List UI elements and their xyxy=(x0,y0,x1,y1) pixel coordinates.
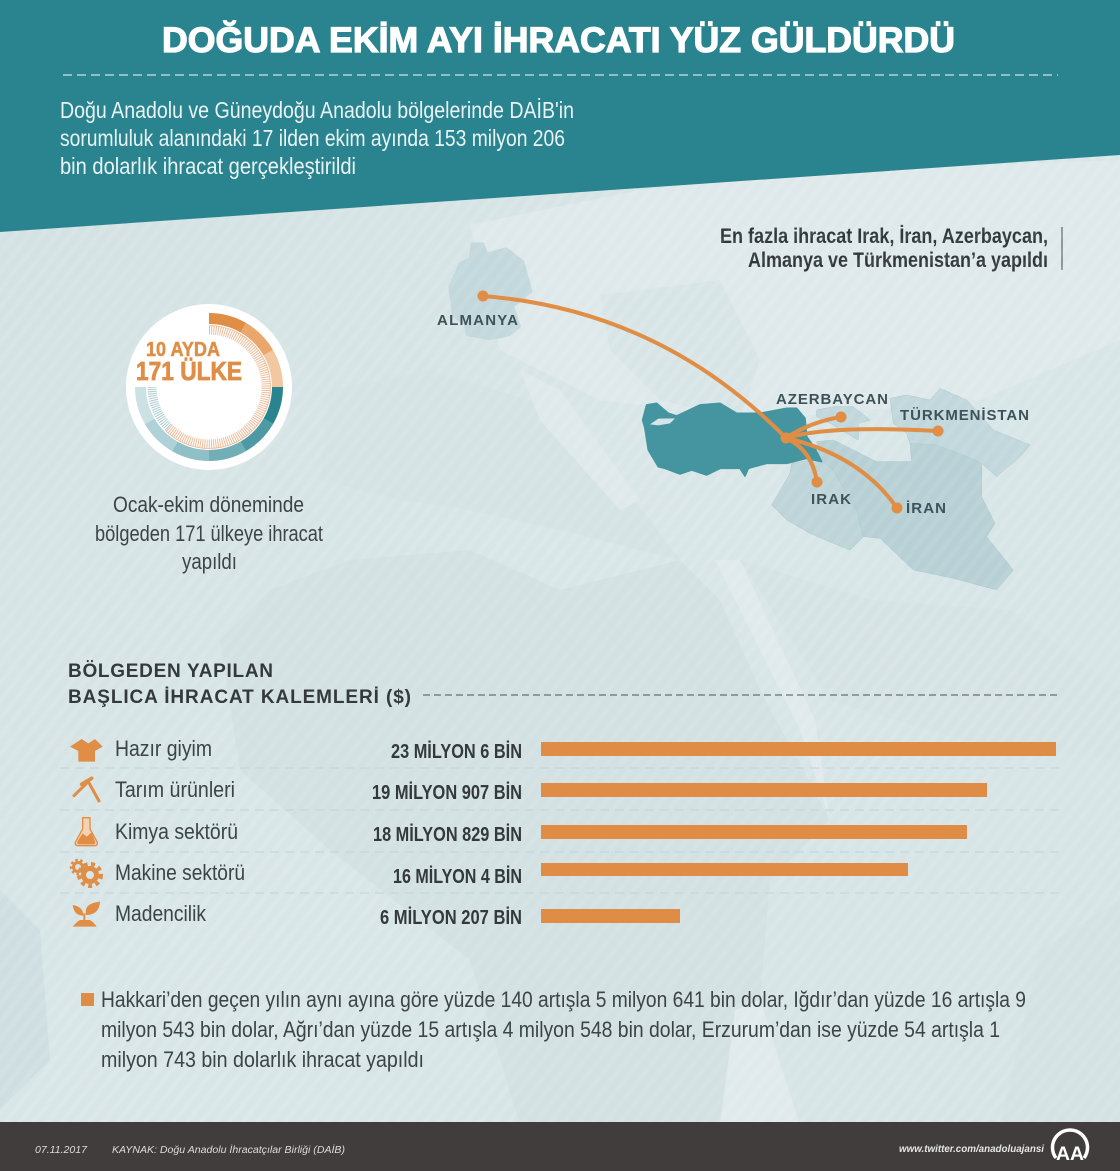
export items chart xyxy=(70,736,1056,929)
date: 07.11.2017 xyxy=(35,1145,87,1156)
row: Makine sektörü xyxy=(71,860,908,888)
bullet note: milyon 543 bin dolar, Ağrı’dan yüzde 15 artışla 4 milyon 548 bin dolar, Erzurum’dan ise yüzde 54 artışla 1 xyxy=(101,1017,1000,1042)
social link: www.twitter.com/anadoluajansi xyxy=(899,1144,1044,1155)
map: country labels: ALMANYA xyxy=(437,312,518,329)
row: Kimya sektörü: Kimya sektörü xyxy=(115,819,238,844)
row: Tarım ürünleri: Tarım ürünleri xyxy=(115,777,235,802)
title: DOĞUDA EKİM AYI İHRACATI YÜZ GÜLDÜRDÜ xyxy=(162,20,955,60)
callout: top export destinations: Almanya ve Türkmenistan’a yapıldı xyxy=(748,249,1048,272)
donut caption: bölgeden 171 ülkeye ihracat xyxy=(95,521,323,546)
row: Tarım ürünleri xyxy=(74,777,987,804)
donut caption: yapıldı xyxy=(182,549,237,574)
donut caption: Ocak-ekim döneminde xyxy=(113,492,304,517)
bullet note xyxy=(81,987,1026,1072)
intro text: sorumluluk alanındaki 17 ilden ekim ayında 153 milyon 206 xyxy=(60,125,565,151)
map: country labels: TÜRKMENİSTAN xyxy=(900,407,1029,424)
donut caption xyxy=(95,492,323,574)
row: Madencilik: Madencilik xyxy=(115,901,207,926)
row: Hazır giyim: 23 MİLYON 6 BİN xyxy=(391,740,522,763)
intro text: bin dolarlık ihracat gerçekleştirildi xyxy=(60,153,356,179)
logo: AA: AA xyxy=(1056,1144,1084,1165)
donut badge xyxy=(126,304,292,470)
map: countries xyxy=(449,243,1030,590)
row: Tarım ürünleri: 19 MİLYON 907 BİN xyxy=(372,781,522,804)
row: Makine sektörü: 16 MİLYON 4 BİN xyxy=(393,865,522,888)
map: Turkey xyxy=(643,403,822,476)
donut badge: 171 ÜLKE xyxy=(136,356,242,386)
header banner xyxy=(0,0,1120,232)
source: KAYNAK: Doğu Anadolu İhracatçılar Birliği (DAİB) xyxy=(112,1144,345,1156)
neighbouring export countries xyxy=(772,388,1030,590)
row: Makine sektörü: Makine sektörü xyxy=(115,860,245,885)
donut badge: 10 AYDA xyxy=(146,339,220,361)
icon: gears xyxy=(71,860,101,886)
row: Kimya sektörü: 18 MİLYON 829 BİN xyxy=(373,823,522,846)
icon: t-shirt xyxy=(70,739,103,762)
map: country labels: AZERBAYCAN xyxy=(776,391,888,408)
row: Madencilik xyxy=(73,901,680,929)
map: country labels xyxy=(437,312,1029,517)
footer bar xyxy=(0,1122,1120,1171)
icon: pickaxe xyxy=(74,778,99,801)
icon: sprout xyxy=(73,902,100,927)
section heading: BAŞLICA İHRACAT KALEMLERİ ($) xyxy=(68,687,411,708)
Germany xyxy=(449,243,532,339)
row: Madencilik: 6 MİLYON 207 BİN xyxy=(380,906,522,929)
row: Kimya sektörü xyxy=(75,818,967,846)
section heading xyxy=(68,661,1060,708)
map: country labels: İRAN xyxy=(906,500,946,517)
row: Hazır giyim: Hazır giyim xyxy=(115,736,212,761)
row: Hazır giyim xyxy=(70,736,1056,763)
bullet note: milyon 743 bin dolarlık ihracat yapıldı xyxy=(101,1047,424,1072)
callout: top export destinations xyxy=(720,225,1062,272)
intro text xyxy=(60,97,574,179)
icon: flask xyxy=(75,818,97,846)
section heading: BÖLGEDEN YAPILAN xyxy=(68,661,273,682)
intro text: Doğu Anadolu ve Güneydoğu Anadolu bölgelerinde DAİB'in xyxy=(60,97,574,123)
logo: AA xyxy=(1052,1130,1087,1165)
map: export routes xyxy=(478,290,944,514)
stripe overlay xyxy=(721,225,1062,272)
map: country labels: IRAK xyxy=(811,491,851,508)
callout: top export destinations: En fazla ihracat Irak, İran, Azerbaycan, xyxy=(720,225,1048,248)
